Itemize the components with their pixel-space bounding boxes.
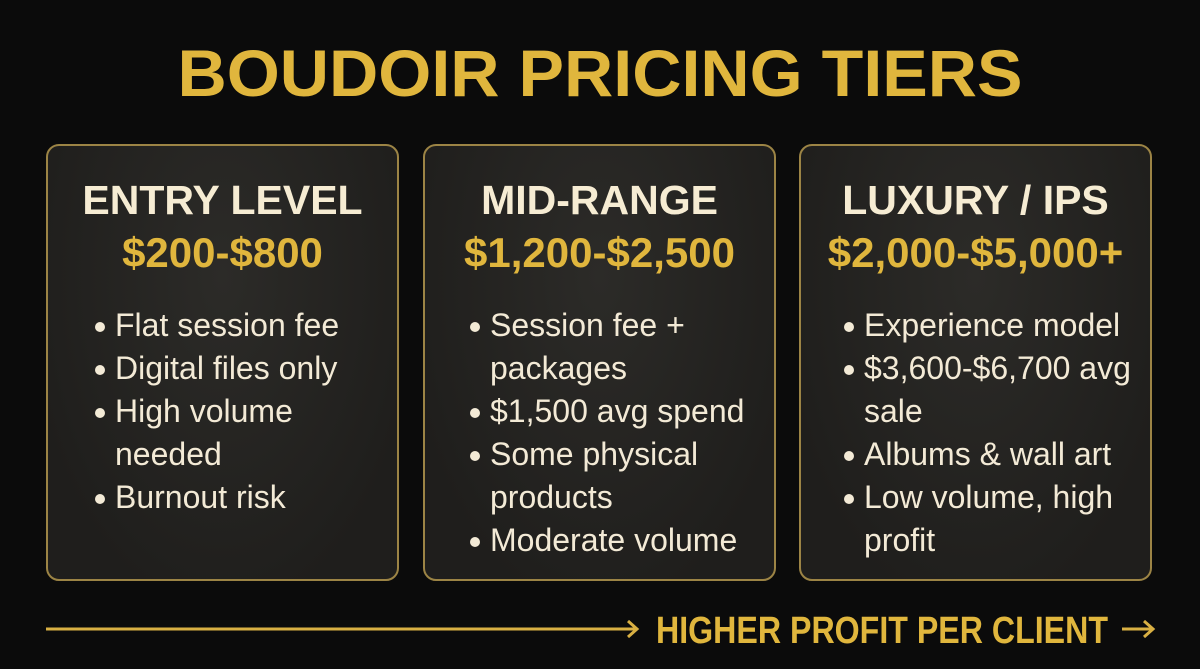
- bullet list: mid: [470, 307, 744, 558]
- panel: luxury: [799, 144, 1152, 581]
- footer arrow: higher profit per client: HIGHER PROFIT PER CLIENT: [656, 610, 1108, 652]
- bullet list: entry: Flat session fee: [115, 307, 339, 343]
- heading: mid-range: MID-RANGE: [481, 177, 718, 223]
- bullet list: luxury: Albums & wall art: [864, 436, 1111, 472]
- footer arrow: higher profit per client: [46, 610, 1156, 652]
- bullet list: entry: Digital files only: [115, 350, 337, 386]
- bullet list: mid: packages: [490, 350, 627, 386]
- bullet list: mid: Session fee +: [490, 307, 685, 343]
- bullet list: luxury: [844, 307, 1131, 558]
- bullet list: luxury: profit: [864, 522, 935, 558]
- heading: luxury: LUXURY / IPS: [842, 177, 1109, 223]
- bullet list: luxury: $3,600-$6,700 avg: [864, 350, 1131, 386]
- bullet list: luxury: Low volume, high: [864, 479, 1113, 515]
- bullet list: entry: needed: [115, 436, 222, 472]
- panel: mid-range: [423, 144, 776, 581]
- heading: entry level: ENTRY LEVEL: [82, 177, 363, 223]
- bullet list: mid: Some physical: [490, 436, 698, 472]
- bullet list: mid: Moderate volume: [490, 522, 737, 558]
- bullet list: entry: Burnout risk: [115, 479, 286, 515]
- bullet list: luxury: Experience model: [864, 307, 1120, 343]
- bullet list: luxury: sale: [864, 393, 923, 429]
- price: entry: $200-$800: [122, 229, 323, 276]
- bullet list: entry: [95, 307, 339, 515]
- panel: entry level: [46, 144, 399, 581]
- bullet list: mid: products: [490, 479, 613, 515]
- price: luxury: $2,000-$5,000+: [828, 229, 1123, 276]
- bullet list: mid: $1,500 avg spend: [490, 393, 744, 429]
- bullet list: entry: High volume: [115, 393, 293, 429]
- title: BOUDOIR PRICING TIERS: [178, 36, 1022, 110]
- price: mid: $1,200-$2,500: [464, 229, 735, 276]
